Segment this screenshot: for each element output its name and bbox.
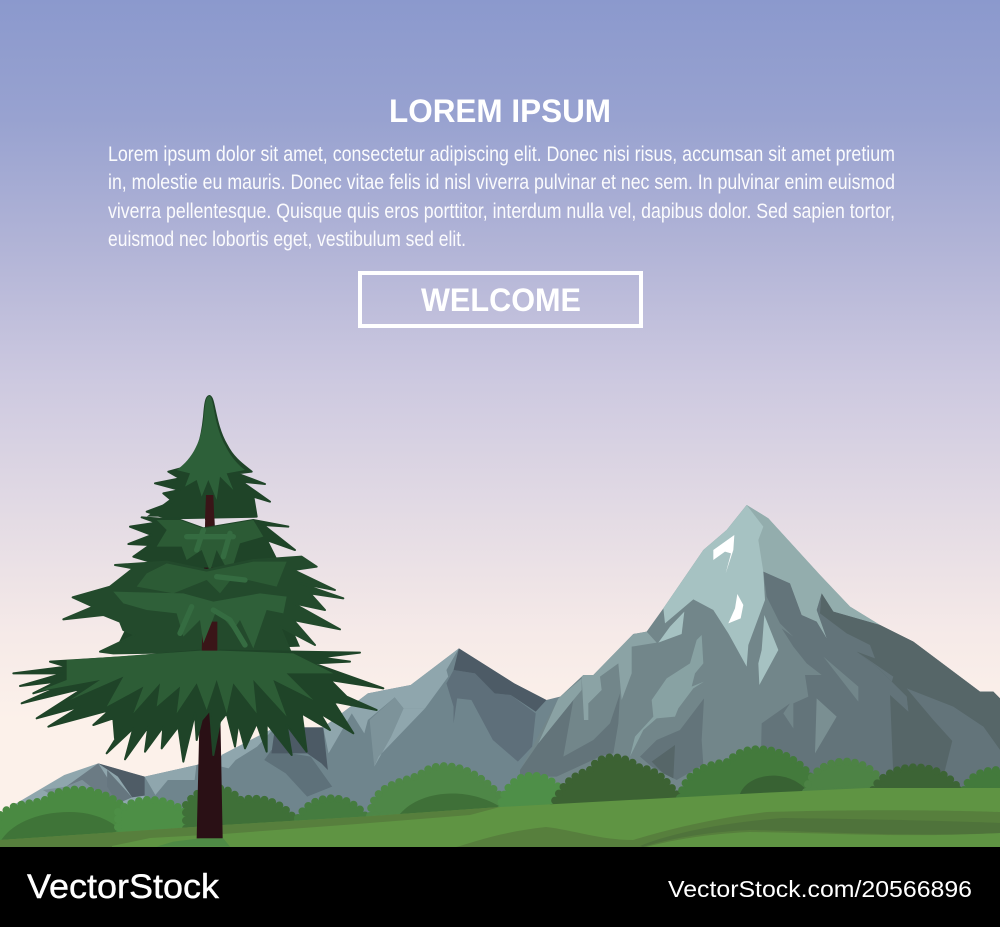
text block: body paragraph: euismod nec lobortis eget, vestibulum sed elit. [108,228,466,251]
bush: centre dark [552,757,682,808]
bush: left small [118,800,192,838]
trunk upper gap [205,495,214,520]
button: welcome [360,273,641,326]
white snow patches [713,535,734,573]
ground [0,788,1000,848]
left light faces [582,632,657,720]
footer bar [0,847,1000,927]
mountain base [513,505,1000,800]
bush: far left [0,790,125,842]
bush: centre right [680,749,810,798]
top tier needles [147,396,270,518]
button: welcome: WELCOME [421,282,581,318]
snowy upper face [663,505,880,667]
highlight streaks [180,530,245,645]
tier 2 light [157,520,263,575]
left flank shade [520,693,620,777]
footer url: VectorStock.com/20566896 [668,876,972,902]
title: LOREM IPSUM [389,93,611,129]
tier 2 needles [128,517,295,567]
right flank shade [760,572,1000,800]
tier 3 light [137,562,287,593]
bush: far right dark [873,767,960,790]
grass tuft [157,838,230,847]
trunk mid gaps [202,622,217,652]
bush: behind tree [186,788,295,832]
bush: centre left [370,766,510,816]
bush: beside tree [298,798,365,826]
bush: right [806,762,882,792]
tree dark body [113,487,300,653]
bushes [0,749,1000,842]
small far-left mountain [11,763,157,847]
bottom tier needles [13,651,383,762]
pine tree [13,396,383,847]
bush: edge right [964,770,1000,790]
light facets [658,612,684,643]
bottom tier light [37,651,333,717]
tier 3 needles [63,557,343,653]
middle mountain [145,648,560,847]
darkest right flank [820,593,1000,777]
big mountain [513,505,1000,800]
lower centre shade [640,698,704,780]
bush: centre small [500,776,565,810]
text block: body paragraph [108,143,895,251]
tier 3b light [113,592,287,648]
footer logo: VectorStock [27,868,220,906]
top spire [177,396,245,500]
trunk [197,495,223,838]
left and middle mountains [11,648,560,847]
